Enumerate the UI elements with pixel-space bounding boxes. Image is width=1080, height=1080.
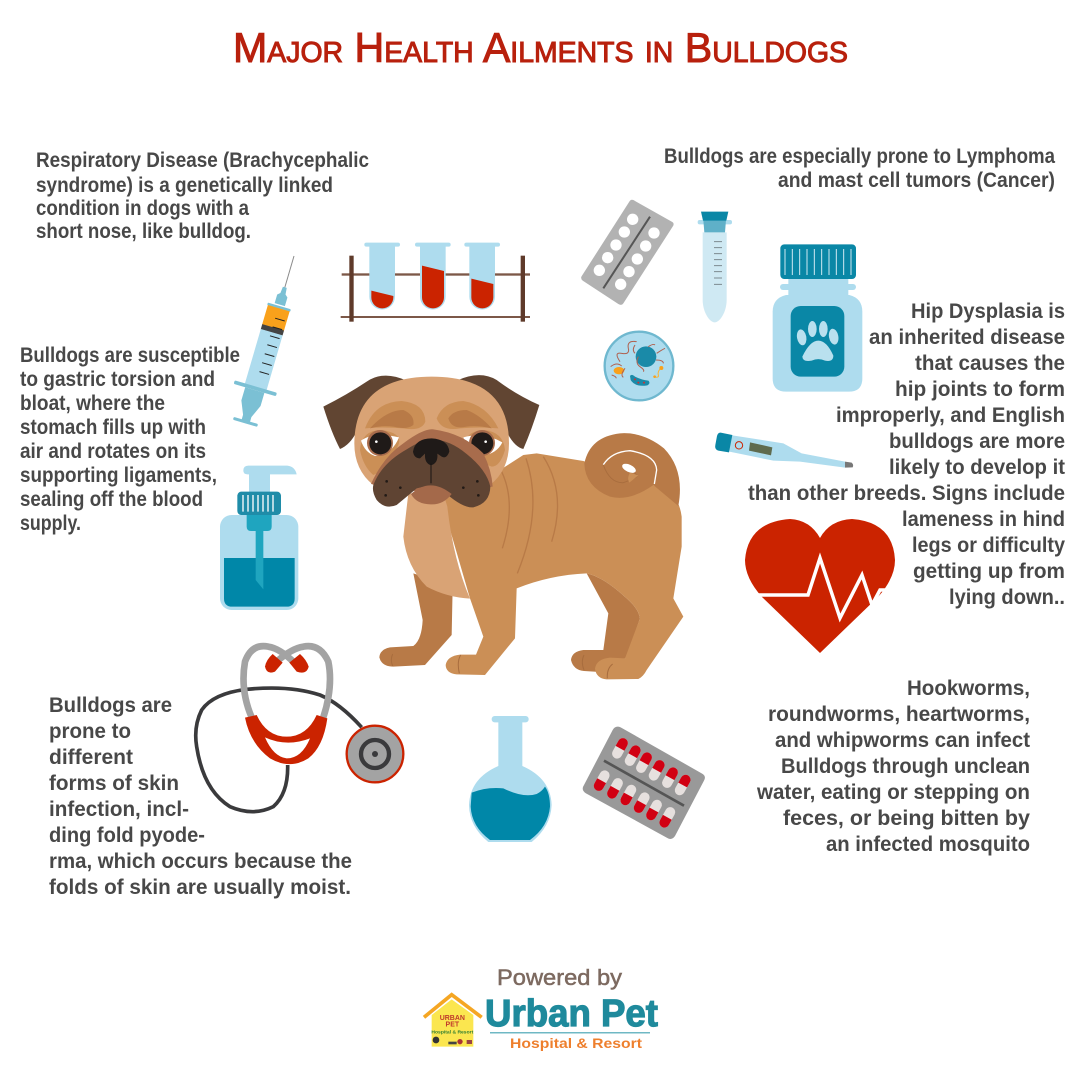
text block: skin infection: infection, incl- xyxy=(49,798,189,821)
text block: hip dysplasia: lying down.. xyxy=(949,586,1065,609)
icon: stethoscope xyxy=(196,646,403,812)
whisker dots xyxy=(384,480,480,497)
icon: heart with ECG line xyxy=(745,519,895,653)
tail xyxy=(584,433,680,506)
logo: Urban Pet house icon: URBAN xyxy=(440,1015,465,1022)
icon: capsule blister pack xyxy=(583,727,705,839)
far front leg xyxy=(379,573,453,667)
text block: gastric torsion: bloat, where the xyxy=(20,392,165,415)
logo: hospital and resort: Hospital & Resort xyxy=(510,1035,642,1051)
text block: hip dysplasia: likely to develop it xyxy=(889,456,1065,479)
title: Major Health Ailments in Bulldogs xyxy=(233,24,848,71)
logo: Urban Pet house icon xyxy=(424,995,482,1047)
icon: round flask xyxy=(469,716,552,842)
text block: worms: Bulldogs through unclean xyxy=(781,755,1030,778)
text block: hip dysplasia: lameness in hind xyxy=(902,508,1065,531)
icon: petri dish with bacteria xyxy=(605,332,673,400)
text block: skin infection: rma, which occurs because the xyxy=(49,850,352,873)
text block: gastric torsion: supply. xyxy=(20,512,81,535)
text block: cancer: and mast cell tumors (Cancer) xyxy=(778,169,1055,192)
nose xyxy=(413,438,449,465)
text block: gastric torsion xyxy=(20,344,240,535)
text block: gastric torsion: Bulldogs are susceptible xyxy=(20,344,240,367)
brow and eye patches xyxy=(360,401,505,475)
text block: worms: roundworms, heartworms, xyxy=(768,703,1030,726)
text block: skin infection: forms of skin xyxy=(49,772,179,795)
body xyxy=(443,453,683,679)
head xyxy=(354,377,509,485)
chin xyxy=(411,485,452,504)
text block: skin infection xyxy=(49,694,352,899)
icon: blood test tubes in rack xyxy=(341,243,530,322)
icon: dog xyxy=(323,375,683,679)
text block: hip dysplasia: that causes the xyxy=(915,352,1065,375)
far hind leg xyxy=(571,573,640,673)
toe lines xyxy=(391,654,613,678)
text block: skin infection: prone to xyxy=(49,720,131,743)
right eye xyxy=(463,430,502,456)
text block: hip dysplasia xyxy=(748,300,1065,609)
footer: powered by: Powered by xyxy=(497,965,622,990)
text block: hip dysplasia: an inherited disease xyxy=(869,326,1065,349)
text block: gastric torsion: sealing off the blood xyxy=(20,488,203,511)
icon: sample tube xyxy=(698,212,732,322)
text block: skin infection: folds of skin are usually moist. xyxy=(49,876,351,899)
icon: medicine bottle with paw xyxy=(773,244,862,392)
logo: underline xyxy=(490,1032,650,1034)
icon: syringe xyxy=(224,250,315,429)
text block: hip dysplasia: than other breeds. Signs include xyxy=(748,482,1065,505)
text block: worms: and whipworms can infect xyxy=(775,729,1030,752)
text block: respiratory disease: short nose, like bulldog. xyxy=(36,220,251,243)
muzzle band xyxy=(371,429,493,493)
text block: gastric torsion: stomach fills up with xyxy=(20,416,206,439)
text block: hip dysplasia: getting up from xyxy=(913,560,1065,583)
icon: digital thermometer xyxy=(715,433,853,468)
text block: hip dysplasia: hip joints to form xyxy=(895,378,1065,401)
logo: Urban Pet house icon: PET xyxy=(446,1022,460,1029)
text block: hip dysplasia: bulldogs are more xyxy=(889,430,1065,453)
text block: worms xyxy=(756,677,1030,856)
muzzle xyxy=(373,439,490,507)
text block: respiratory disease xyxy=(36,149,369,243)
text block: skin infection: ding fold pyode- xyxy=(49,824,205,847)
left ear xyxy=(323,376,407,449)
text block: worms: Hookworms, xyxy=(907,677,1030,700)
icon: soap pump bottle xyxy=(220,466,298,610)
logo: Urban Pet wordmark: Urban Pet xyxy=(485,993,658,1035)
text block: hip dysplasia: Hip Dysplasia is xyxy=(911,300,1065,323)
text block: skin infection: Bulldogs are xyxy=(49,694,172,717)
text block: worms: feces, or being bitten by xyxy=(783,807,1030,830)
text block: hip dysplasia: legs or difficulty xyxy=(912,534,1065,557)
text block: worms: water, eating or stepping on xyxy=(756,781,1030,804)
text block: gastric torsion: supporting ligaments, xyxy=(20,464,217,487)
left eye xyxy=(361,430,399,456)
text block: respiratory disease: condition in dogs with a xyxy=(36,197,249,220)
text block: cancer xyxy=(664,145,1055,192)
text block: hip dysplasia: improperly, and English xyxy=(836,404,1065,427)
right ear xyxy=(457,375,539,449)
chest xyxy=(403,493,470,599)
icon: tablet blister pack xyxy=(581,200,674,305)
text block: respiratory disease: Respiratory Disease (Brachycephalic xyxy=(36,149,369,172)
body wrinkles xyxy=(502,457,558,573)
text block: respiratory disease: syndrome) is a genetically linked xyxy=(36,174,333,197)
text block: gastric torsion: air and rotates on its xyxy=(20,440,206,463)
text block: gastric torsion: to gastric torsion and xyxy=(20,368,215,391)
text block: worms: an infected mosquito xyxy=(826,833,1030,856)
logo: Urban Pet house icon: Hospital & Resort xyxy=(431,1030,474,1036)
text block: skin infection: different xyxy=(49,746,133,769)
